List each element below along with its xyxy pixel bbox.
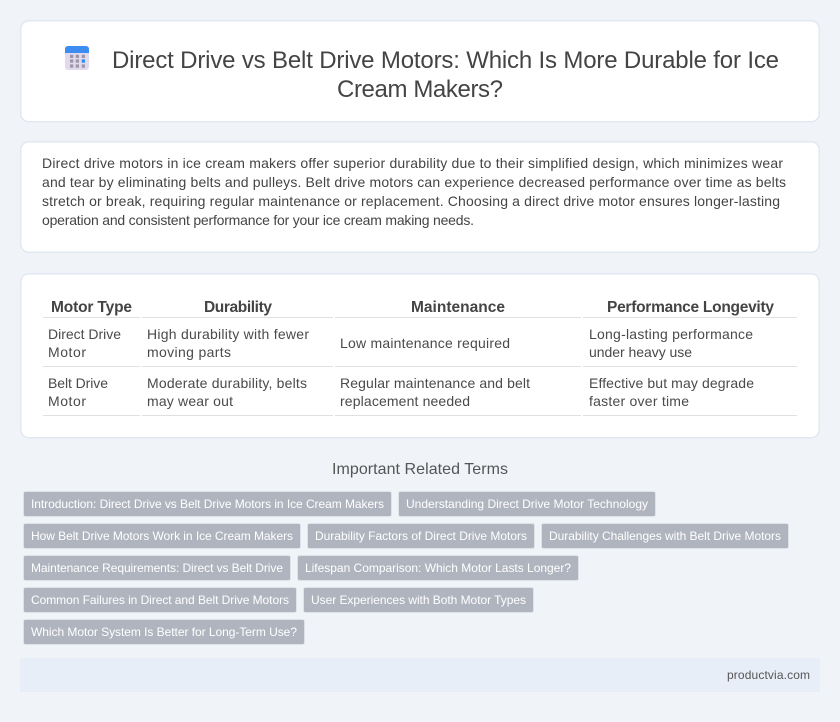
tag: Lifespan Comparison: Which Motor Lasts Longer? [305, 561, 571, 575]
tag [24, 524, 300, 548]
table row: direct drive motor: Motor [48, 344, 86, 360]
tag: How Belt Drive Motors Work in Ice Cream Makers [31, 529, 293, 543]
table row: belt drive motor [43, 375, 797, 416]
panel: summary [21, 142, 819, 252]
table header [43, 299, 797, 318]
tag [542, 524, 788, 548]
footer bar [20, 658, 820, 692]
text block: summary paragraph: operation and consistent performance for your ice cream making needs. [42, 212, 474, 228]
text block: summary paragraph: and tear by eliminating belts and pulleys. Belt drive motors can experience decreased performance over time as belts [42, 174, 786, 190]
tag [24, 556, 290, 580]
table header: Performance Longevity [607, 299, 774, 316]
tag [24, 620, 304, 644]
tag: Introduction: Direct Drive vs Belt Drive Motors in Ice Cream Makers [31, 497, 384, 511]
title: Direct Drive vs Belt Drive Motors: Which Is More Durable for Ice [112, 47, 779, 74]
tag: Common Failures in Direct and Belt Drive Motors [31, 593, 289, 607]
tag: User Experiences with Both Motor Types [311, 593, 526, 607]
tag: Durability Challenges with Belt Drive Motors [549, 529, 781, 543]
icon: calendar [65, 46, 89, 70]
tag [308, 524, 534, 548]
table row: direct drive motor: moving parts [147, 344, 231, 360]
table row: belt drive motor: Moderate durability, belts [147, 375, 307, 391]
tag: Maintenance Requirements: Direct vs Belt Drive [31, 561, 283, 575]
table row: belt drive motor: faster over time [589, 393, 689, 409]
table row: belt drive motor: may wear out [147, 393, 233, 409]
table header: Maintenance [411, 299, 505, 316]
table row: belt drive motor: Regular maintenance and belt [340, 375, 530, 391]
table row: belt drive motor: Belt Drive [48, 375, 108, 391]
table row: direct drive motor [43, 326, 797, 367]
table row: direct drive motor: Low maintenance required [340, 335, 510, 351]
table row: direct drive motor: Long-lasting performance [589, 326, 753, 342]
tag [24, 588, 296, 612]
text block: summary paragraph: Direct drive motors in ice cream makers offer superior durability due to their simplified design, which minimizes wear [42, 155, 783, 171]
tag [24, 492, 392, 516]
panel: comparison table [21, 274, 819, 438]
table row: belt drive motor: Motor [48, 393, 86, 409]
footer: source: productvia.com [727, 668, 810, 682]
table header: Motor Type [51, 299, 132, 316]
title: Cream Makers? [337, 76, 503, 103]
table row: direct drive motor: under heavy use [589, 344, 692, 360]
table row: belt drive motor: replacement needed [340, 393, 470, 409]
table row: direct drive motor: High durability with fewer [147, 326, 309, 342]
tag list [24, 492, 788, 644]
tag: Durability Factors of Direct Drive Motors [315, 529, 527, 543]
text block: summary paragraph: stretch or break, requiring regular maintenance or replacement. Choosing a direct drive motor ensures longer-lasting [42, 193, 780, 209]
panel: title card [21, 21, 819, 122]
tag: Which Motor System Is Better for Long-Term Use? [31, 625, 297, 639]
table row: direct drive motor: Direct Drive [48, 326, 121, 342]
text block: summary paragraph [42, 155, 786, 228]
table row: belt drive motor: Effective but may degrade [589, 375, 754, 391]
heading: related terms: Important Related Terms [332, 461, 508, 478]
tag [298, 556, 578, 580]
title [112, 47, 779, 103]
tag: Understanding Direct Drive Motor Technology [406, 497, 648, 511]
table header: Durability [204, 299, 272, 316]
tag [398, 492, 656, 516]
tag [304, 588, 534, 612]
